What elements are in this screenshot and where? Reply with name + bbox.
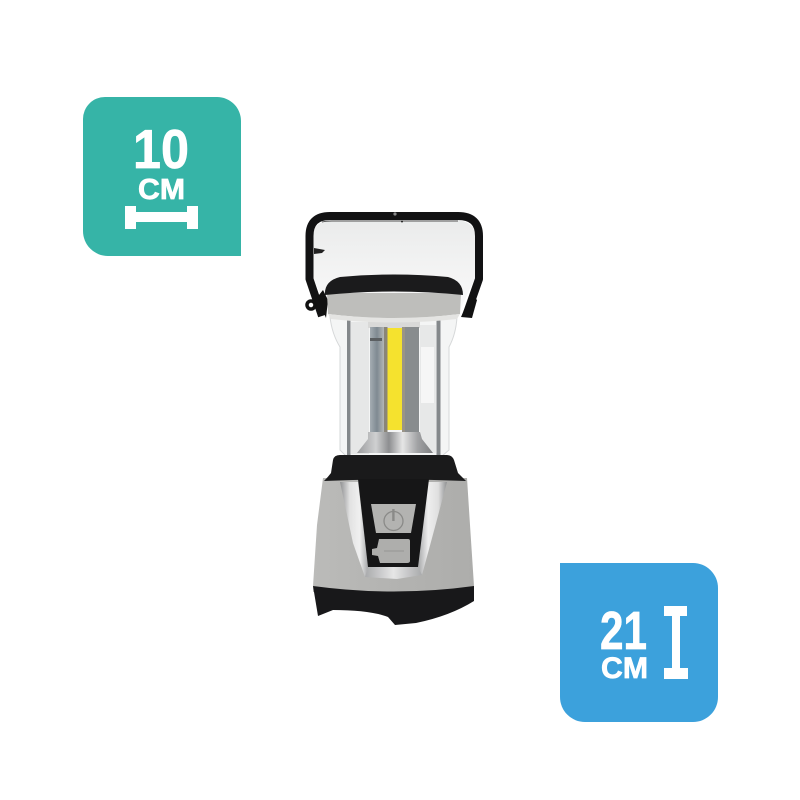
USB port cover xyxy=(372,539,410,563)
value: 21: 21 xyxy=(600,601,647,661)
icon: width bar xyxy=(125,206,198,229)
badge background: teal xyxy=(83,97,241,256)
lantern top cap xyxy=(325,274,463,322)
cap: grey ring xyxy=(327,293,461,318)
power button xyxy=(371,504,416,533)
cap: black top xyxy=(325,274,463,295)
silver trim xyxy=(340,482,447,579)
unit: CM: CM xyxy=(138,174,185,206)
yellow LED strip xyxy=(388,328,402,430)
badge: width 10 cm xyxy=(83,97,241,256)
product: camping lantern xyxy=(307,212,479,625)
lantern black base xyxy=(313,586,474,625)
lantern black collar xyxy=(324,455,466,481)
LED light column xyxy=(368,316,420,432)
unit: CM: CM xyxy=(601,652,648,685)
value: 10: 10 xyxy=(133,118,189,180)
lantern handle xyxy=(307,212,479,318)
lantern grey body xyxy=(313,478,474,594)
lantern glass globe xyxy=(330,317,457,456)
badge background: blue xyxy=(560,563,718,722)
black control panel xyxy=(358,479,429,567)
cap: pale lip xyxy=(328,314,460,322)
lantern metal cone xyxy=(357,432,433,453)
badge: height 21 cm xyxy=(560,563,718,722)
handle ring xyxy=(307,301,315,309)
icon: height bar xyxy=(664,606,688,679)
